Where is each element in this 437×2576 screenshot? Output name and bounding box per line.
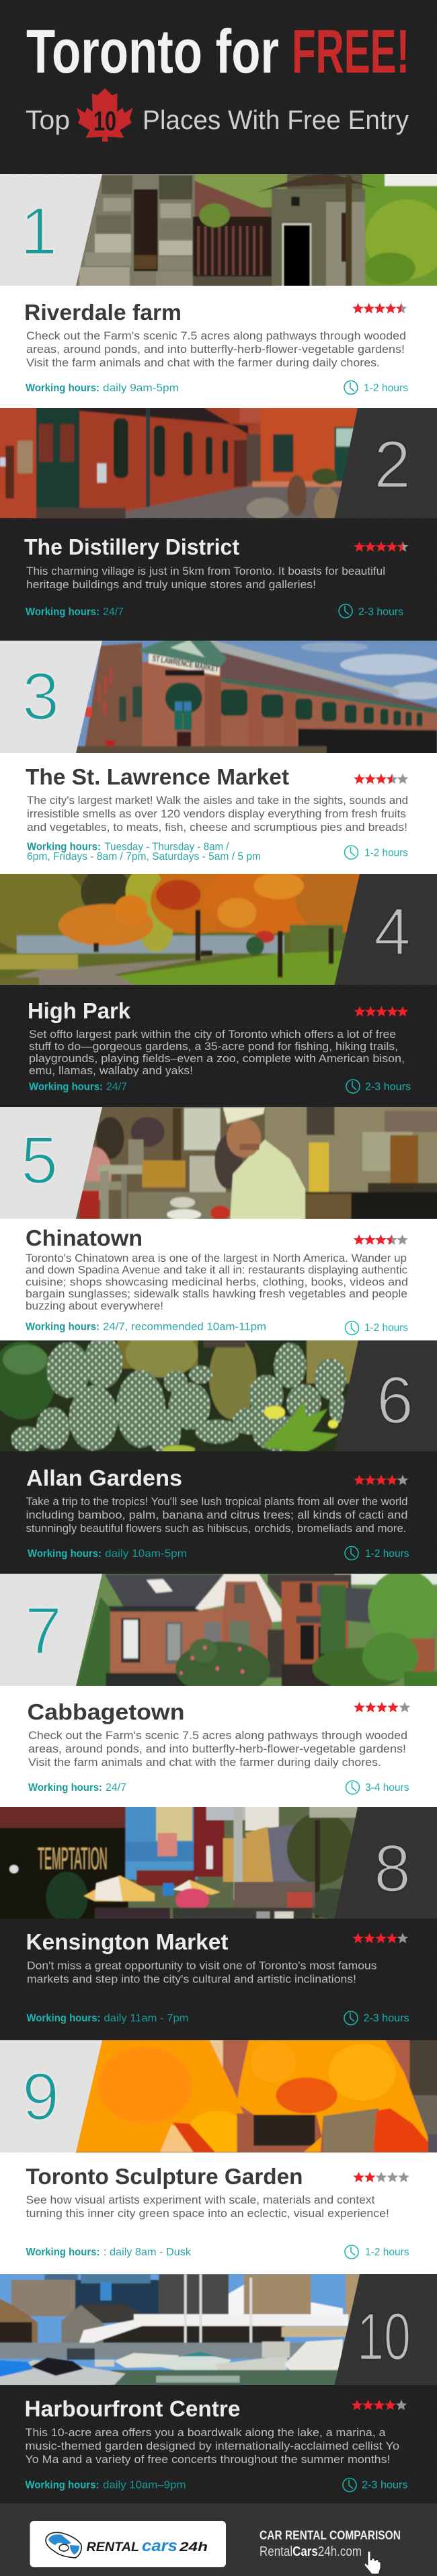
visit duration with clock icon: 1-2 hours xyxy=(364,847,408,859)
section 9: Toronto Sculpture Garden xyxy=(0,2036,437,2274)
website address: RentalCars24h.com xyxy=(260,2544,362,2559)
visit duration with clock icon xyxy=(343,2478,407,2491)
description xyxy=(27,795,408,834)
working hours: daily 10am-5pm xyxy=(105,1548,187,1560)
working hours: 24/7 xyxy=(103,606,124,618)
visit duration with clock icon: 1-2 hours xyxy=(365,2247,409,2258)
subtitle xyxy=(26,106,409,135)
section 6: Allan Gardens xyxy=(0,1330,437,1574)
working hours xyxy=(26,383,179,394)
photo: brick distillery lane xyxy=(0,408,358,518)
photo: stone farm building xyxy=(76,174,437,286)
rating stars xyxy=(352,2400,407,2410)
title: Toronto for xyxy=(26,17,279,86)
icon: pointing hand cursor xyxy=(364,2551,381,2574)
logo wordmark: RENTAL xyxy=(86,2540,139,2554)
description xyxy=(26,2427,399,2466)
number badge 5: 5 xyxy=(21,1123,58,1197)
working hours: : daily 8am - Dusk xyxy=(104,2247,192,2258)
description: including bamboo, palm, banana and citrus trees; all kinds of cacti and xyxy=(26,1509,407,1521)
visit duration with clock icon xyxy=(346,1781,409,1794)
number badge 3 xyxy=(0,641,102,753)
working hours xyxy=(26,2247,192,2258)
description: Set offto largest park within the city of Toronto which offers a lot of free xyxy=(29,1029,396,1041)
description: Check out the Farm's scenic 7.5 acres along pathways through wooded xyxy=(26,330,406,342)
number badge 2 xyxy=(335,408,437,518)
working hours: 24/7, recommended 10am-11pm xyxy=(103,1322,266,1332)
place name: High Park xyxy=(28,998,131,1023)
footer panel xyxy=(0,2503,437,2576)
rating stars xyxy=(354,774,408,784)
logo wordmark: 24h xyxy=(179,2540,208,2554)
visit duration with clock icon xyxy=(344,846,408,859)
photo: St. Lawrence Market building: ST LAWRENCE MARKET xyxy=(151,655,219,674)
rating stars xyxy=(354,1006,408,1016)
header panel xyxy=(0,0,437,174)
description: markets and step into the city's cultural and artistic inclinations! xyxy=(27,1974,356,1986)
section 4: High Park xyxy=(0,874,437,1094)
description: Take a trip to the tropics! You'll see lush tropical plants from all over the world xyxy=(26,1496,407,1508)
working hours: Working hours: xyxy=(28,1782,102,1794)
call to action heading: CAR RENTAL COMPARISON xyxy=(260,2529,401,2542)
description: The city's largest market! Walk the aisles and take in the sights, sounds and xyxy=(27,795,408,807)
working hours xyxy=(26,1322,266,1332)
subtitle: Places With Free Entry xyxy=(143,106,409,135)
working hours: Working hours: xyxy=(29,1081,103,1093)
number badge 6 xyxy=(335,1340,437,1451)
place name: The Distillery District xyxy=(24,534,239,559)
section 8: Kensington Market xyxy=(0,1802,437,2040)
working hours xyxy=(27,842,261,862)
description: Check out the Farm's scenic 7.5 acres along pathways through wooded xyxy=(28,1730,407,1742)
number badge 1: 1 xyxy=(20,194,57,268)
working hours: daily 9am-5pm xyxy=(103,383,179,394)
section 3: The St. Lawrence Market xyxy=(0,635,437,874)
photo: chef in Chinatown kitchen xyxy=(76,1107,437,1219)
description xyxy=(26,1252,408,1312)
photo: cacti in Allan Gardens xyxy=(0,1340,358,1451)
number badge 10: 10 xyxy=(357,2299,411,2374)
rating stars xyxy=(353,2172,409,2182)
section 1: Riverdale farm xyxy=(0,170,437,408)
description: stuff to do—gorgeous gardens, a 35-acre pond for fishing, hiking trails, xyxy=(29,1041,398,1053)
photo: Kensington Market street xyxy=(0,1807,358,1919)
description: emu, llamas, wallaby and yaks! xyxy=(29,1065,193,1077)
description: areas, around ponds, and into butterfly-herb-flower-vegetable gardens! xyxy=(26,344,405,356)
description xyxy=(26,2194,389,2220)
description: stunningly beautiful flowers such as hibiscus, orchids, bromeliads and more. xyxy=(26,1523,406,1535)
working hours: 6pm, Fridays - 8am / 7pm, Saturdays - 5am / 5 pm xyxy=(27,851,261,862)
number badge 7 xyxy=(0,1574,102,1686)
photo: Harbourfront marina xyxy=(0,2274,360,2385)
description: and down Spadina Avenue and take it all in: restaurants displaying authentic xyxy=(26,1264,407,1276)
visit duration with clock icon: 2-3 hours xyxy=(358,606,403,618)
place name: Kensington Market xyxy=(26,1929,229,1954)
description: See how visual artists experiment with scale, materials and context xyxy=(26,2194,375,2206)
dark panel xyxy=(0,1919,437,2040)
number badge 8: 8 xyxy=(374,1831,411,1905)
description: turning this inner city green space into an eclectic, visual experience! xyxy=(26,2208,389,2220)
visit duration with clock icon: 3-4 hours xyxy=(365,1782,409,1794)
working hours xyxy=(26,2479,186,2491)
rating stars xyxy=(354,1702,410,1712)
description: music-themed garden designed by internationally-acclaimed cellist Yo xyxy=(26,2440,399,2452)
place name: Allan Gardens xyxy=(26,1465,182,1490)
number badge 4 xyxy=(335,874,437,985)
number badge 2: 2 xyxy=(374,427,411,501)
icon: maple leaf with 10: 10 xyxy=(93,106,116,136)
description: playgrounds, playing fields–even a zoo, complete with American bison, xyxy=(29,1053,405,1065)
rating stars xyxy=(352,1933,408,1943)
description xyxy=(28,1730,407,1769)
photo: St. Lawrence Market building xyxy=(76,641,437,753)
visit duration with clock icon: 1-2 hours xyxy=(365,1548,409,1560)
description: cuisine; shops showcasing medicinal herbs, clothing, books, videos and xyxy=(26,1276,408,1288)
photo: autumn trees in High Park xyxy=(0,874,360,985)
icon: maple leaf with 10 xyxy=(77,88,133,142)
working hours: Working hours: xyxy=(27,842,101,852)
description xyxy=(26,330,406,369)
number badge 7: 7 xyxy=(25,1593,62,1668)
description: irresistible smells as over 120 vendors display everything from fresh fruits xyxy=(27,808,406,820)
photo: orange bear sculptures xyxy=(76,2040,437,2152)
working hours xyxy=(28,1548,187,1560)
photo: Victorian brick houses in Cabbagetown xyxy=(76,1574,437,1686)
description: heritage buildings and truly unique stores and galleries! xyxy=(26,579,316,591)
description: areas, around ponds, and into butterfly-herb-flower-vegetable gardens! xyxy=(28,1743,406,1755)
visit duration with clock icon xyxy=(344,2011,409,2025)
description: This charming village is just in 5km from Toronto. It boasts for beautiful xyxy=(26,565,385,577)
number badge 9 xyxy=(0,2040,102,2152)
working hours: daily 10am–9pm xyxy=(103,2479,186,2491)
description: buzzing about everywhere! xyxy=(26,1300,163,1312)
visit duration with clock icon: 1-2 hours xyxy=(364,383,408,394)
working hours: Working hours: xyxy=(27,2013,101,2024)
visit duration with clock icon xyxy=(346,1322,408,1335)
working hours: Working hours: xyxy=(26,606,100,618)
place name: Cabbagetown xyxy=(27,1699,184,1724)
number badge 1 xyxy=(0,174,102,286)
visit duration with clock icon: 1-2 hours xyxy=(364,1322,408,1334)
subtitle: Top xyxy=(26,106,70,135)
place name: Harbourfront Centre xyxy=(24,2396,241,2421)
logo wordmark: cars xyxy=(142,2537,177,2555)
working hours: 24/7 xyxy=(106,1081,127,1093)
number badge 4: 4 xyxy=(374,894,411,969)
rating stars xyxy=(354,1234,408,1245)
visit duration with clock icon xyxy=(345,1546,409,1560)
description xyxy=(26,1496,407,1535)
description: Don't miss a great opportunity to visit one of Toronto's most famous xyxy=(27,1960,376,1972)
place name: Chinatown xyxy=(26,1225,143,1250)
number badge 10 xyxy=(335,2274,437,2385)
description xyxy=(27,1960,376,1986)
description: Visit the farm animals and chat with the farmer during daily chores. xyxy=(28,1757,381,1769)
logo wordmark xyxy=(86,2537,208,2555)
place name: Riverdale farm xyxy=(24,300,182,325)
white panel xyxy=(0,753,437,874)
rating stars xyxy=(354,541,408,552)
visit duration with clock icon: 2-3 hours xyxy=(363,2013,409,2024)
visit duration with clock icon: 2-3 hours xyxy=(365,1081,411,1093)
white panel xyxy=(0,286,437,408)
section 2: The Distillery District xyxy=(0,408,437,618)
description: bargain sunglasses; sidewalk stalls hawking fresh vegetables and people xyxy=(26,1288,407,1300)
number badge 6: 6 xyxy=(376,1363,413,1437)
visit duration with clock icon xyxy=(339,604,403,618)
description xyxy=(29,1029,405,1077)
visit duration with clock icon: 2-3 hours xyxy=(362,2479,407,2491)
description: Visit the farm animals and chat with the farmer during daily chores. xyxy=(26,357,380,369)
working hours: 24/7 xyxy=(106,1782,126,1794)
section 10: Harbourfront Centre xyxy=(0,2271,437,2503)
working hours: Working hours: xyxy=(28,1548,102,1560)
icon: car xyxy=(46,2532,81,2558)
logo card xyxy=(30,2521,226,2567)
number badge 9: 9 xyxy=(22,2059,59,2134)
description: Toronto's Chinatown area is one of the largest in North America. Wander up xyxy=(26,1252,407,1264)
working hours: Working hours: xyxy=(26,2479,100,2491)
dark panel xyxy=(0,1451,437,1574)
number badge 8 xyxy=(335,1807,437,1919)
visit duration with clock icon xyxy=(344,380,408,394)
photo: Kensington Market street: TEMPTATION xyxy=(38,1842,108,1876)
number badge 5 xyxy=(0,1107,102,1219)
white panel xyxy=(0,1219,437,1340)
section 7: Cabbagetown xyxy=(0,1570,437,1807)
description: and vegetables, to meats, fish, cheese and scrumptious pies and breads! xyxy=(27,821,407,834)
rating stars xyxy=(354,1475,408,1485)
working hours xyxy=(27,2013,188,2024)
visit duration with clock icon xyxy=(345,2245,409,2259)
white panel xyxy=(0,1686,437,1807)
dark panel xyxy=(0,985,437,1107)
working hours: Working hours: xyxy=(26,383,100,394)
working hours: daily 11am - 7pm xyxy=(104,2013,188,2024)
section 5: Chinatown xyxy=(0,1102,437,1340)
rating stars xyxy=(352,303,407,313)
dark panel xyxy=(0,2385,437,2503)
number badge 3: 3 xyxy=(22,659,59,733)
visit duration with clock icon xyxy=(346,1080,411,1093)
white panel xyxy=(0,2152,437,2274)
place name: Toronto Sculpture Garden xyxy=(26,2164,303,2189)
working hours: Working hours: xyxy=(26,2247,100,2258)
description: Yo Ma and a variety of free concerts throughout the summer months! xyxy=(26,2454,390,2466)
dark panel xyxy=(0,518,437,641)
working hours: Working hours: xyxy=(26,1322,100,1332)
description: This 10-acre area offers you a boardwalk along the lake, a marina, a xyxy=(26,2427,386,2439)
description xyxy=(26,565,385,591)
place name: The St. Lawrence Market xyxy=(26,764,289,789)
working hours: Tuesday - Thursday - 8am / xyxy=(105,842,229,852)
